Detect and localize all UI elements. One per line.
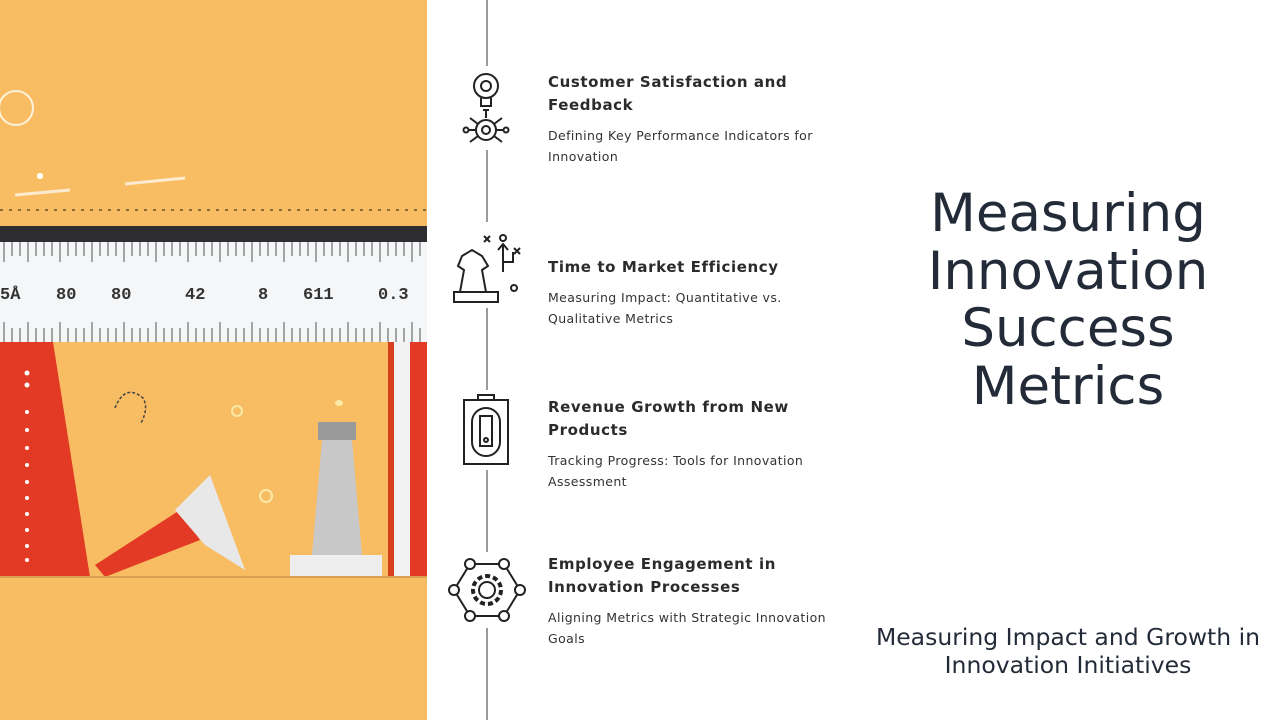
illustration: ruler and measuring tools: 80 [56,286,76,305]
illustration: ruler and measuring tools: 42 [185,286,205,305]
item 1 text: Defining Key Performance Indicators for Innovation [548,128,813,164]
item 2 text: Time to Market Efficiency [548,258,779,276]
item 2 text [548,258,782,326]
item 4 text [548,555,826,646]
timeline line [486,0,488,720]
item 1 text [548,73,813,164]
item 1 text: Customer Satisfaction and Feedback [548,73,787,114]
illustration: ruler and measuring tools: 5Å [0,285,21,305]
illustration: ruler and measuring tools: 0.3 [378,286,409,305]
illustration: ruler and measuring tools: 611 [303,286,334,305]
item 3 text [548,398,803,489]
item 3 text: Revenue Growth from New Products [548,398,789,439]
title: Measuring Innovation Success Metrics [928,183,1208,416]
item 4 text: Aligning Metrics with Strategic Innovation Goals [548,610,826,646]
icon: hexagon gear [448,552,526,628]
icon: clipboard [458,390,516,470]
item 3 text: Tracking Progress: Tools for Innovation Assessment [548,453,803,489]
icon: chess knight [448,222,526,308]
illustration: ruler and measuring tools: 80 [111,286,131,305]
illustration: ruler and measuring tools [0,0,427,720]
illustration: ruler and measuring tools: 8 [258,286,268,305]
item 4 text: Employee Engagement in Innovation Processes [548,555,776,596]
subtitle: Measuring Impact and Growth in Innovation Initiatives [876,623,1260,679]
item 2 text: Measuring Impact: Quantitative vs. Qualitative Metrics [548,290,782,326]
icon: lightbulb gear [456,66,516,150]
